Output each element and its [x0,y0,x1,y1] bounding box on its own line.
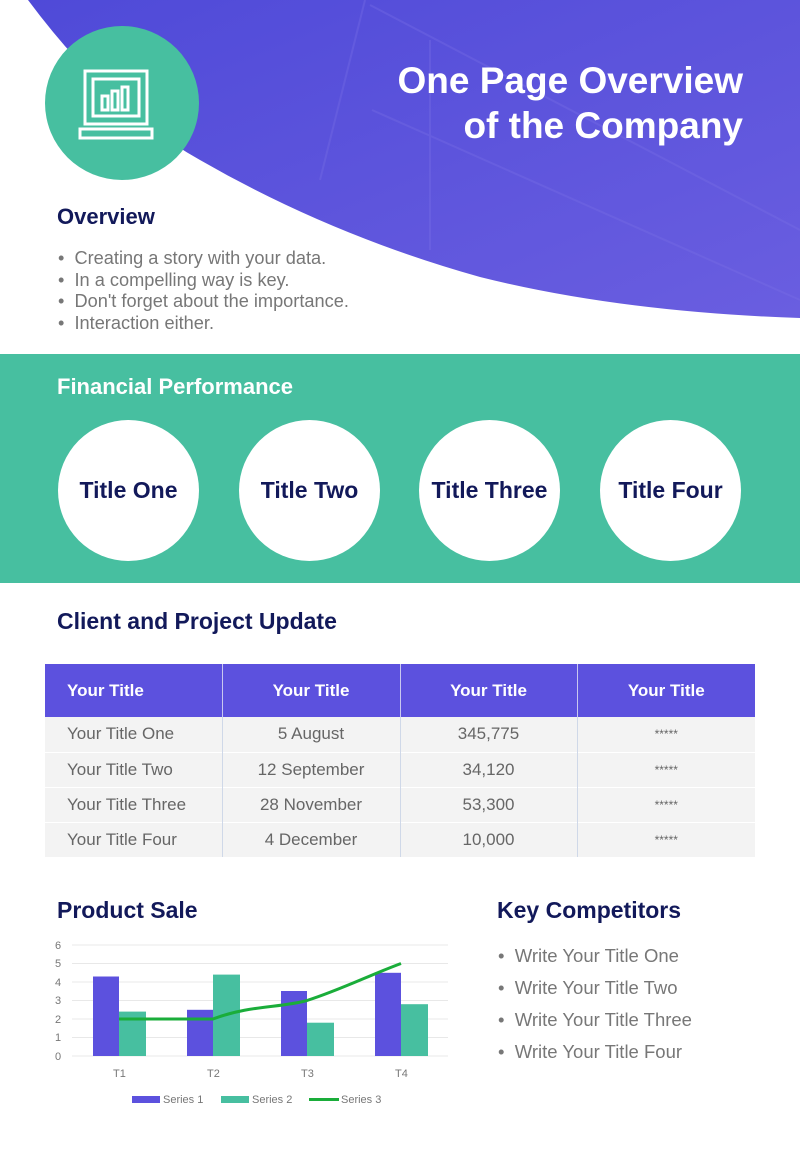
bar chart: T1 [113,1068,126,1080]
table: Your Title Three [67,794,186,814]
table: ***** [655,798,678,812]
table: 345,775 [458,724,519,743]
circle: title two: Title Two [261,477,358,503]
bar chart: 0 [55,1051,61,1063]
competitors list: • Write Your Title Two [498,977,678,998]
bar chart [55,940,448,1106]
heading: financial performance: Financial Performance [57,374,293,399]
bar chart: 5 [55,958,61,970]
overview bullets [58,248,349,332]
table: 5 August [278,724,344,743]
bar chart: Series 2 [252,1094,292,1106]
bar chart: T4 [395,1068,408,1080]
panel: financial performance [0,354,800,583]
bar chart: 1 [55,1032,61,1044]
heading: overview: Overview [57,204,155,229]
bar chart: T3 [301,1068,314,1080]
heading: product sale: Product Sale [57,897,198,923]
table: 34,120 [462,760,514,778]
bar chart: Series 3 [341,1094,381,1106]
table [45,664,755,857]
competitors list [498,945,692,1062]
icon: laptop chart in green circle [45,26,199,180]
circle: title two [239,420,380,561]
bar chart: 4 [55,977,61,989]
bar chart: 6 [55,940,61,952]
table: 10,000 [462,830,514,849]
table: ***** [655,833,678,847]
table: 53,300 [462,794,514,814]
circle: title one [58,420,199,561]
circle: title three [419,420,560,561]
bar chart: 3 [55,995,61,1007]
circle: title one: Title One [80,477,178,503]
table: 12 September [258,760,364,778]
overview bullets: • Interaction either. [58,312,214,332]
table: Your Title [628,680,705,700]
title: One Page Overview [397,60,743,101]
title: of the Company [463,105,743,146]
overview bullets: • In a compelling way is key. [58,270,289,290]
competitors list: • Write Your Title Three [498,1009,692,1030]
circle: title four [600,420,741,561]
table: ***** [655,762,678,776]
title [397,60,744,146]
heading: client and project update: Client and Project Update [57,608,337,634]
circle: title four: Title Four [618,477,723,503]
competitors list: • Write Your Title Four [498,1041,682,1062]
table: Your Title [67,680,144,700]
table: Your Title [450,680,527,700]
heading: key competitors: Key Competitors [497,897,681,923]
bar chart: T2 [207,1068,220,1080]
table: 4 December [265,830,357,849]
table: Your Title [273,680,349,700]
overview bullets: • Creating a story with your data. [58,248,326,268]
circle: title three: Title Three [432,477,547,503]
bar chart: Series 1 [163,1094,203,1106]
competitors list: • Write Your Title One [498,945,679,966]
overview bullets: • Don't forget about the importance. [58,291,349,311]
table: 28 November [260,794,362,814]
header background shape [28,0,800,318]
table: ***** [655,727,678,741]
table: Your Title Four [67,830,177,849]
bar chart: 2 [55,1014,61,1026]
table: Your Title Two [67,760,173,778]
table: Your Title One [67,724,174,743]
